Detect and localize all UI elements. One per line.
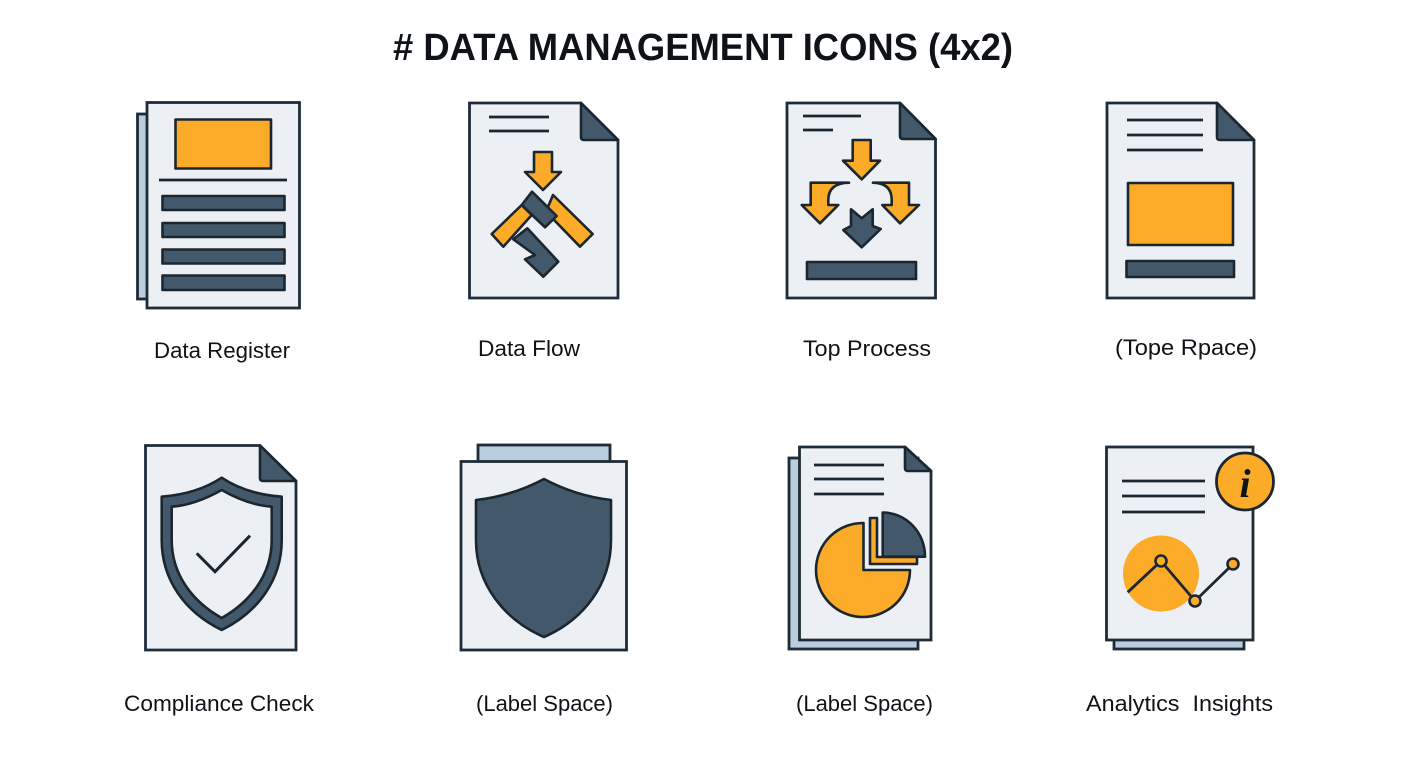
label: label space 2: (Label Space) xyxy=(796,691,933,716)
label: analytics insights: Analytics Insights xyxy=(1086,691,1273,716)
icon: data flow xyxy=(470,103,618,298)
label: tope rpace: (Tope Rpace) xyxy=(1115,335,1257,360)
label: top process: Top Process xyxy=(803,336,931,361)
label: data register: Data Register xyxy=(154,338,290,363)
title: # DATA MANAGEMENT ICONS (4x2) xyxy=(393,27,1013,69)
icon: compliance check xyxy=(146,446,296,650)
icon: tope rpace xyxy=(1107,103,1254,298)
icon: top process xyxy=(787,103,936,298)
icon: analytics insights xyxy=(1106,447,1274,649)
icon: label space shield xyxy=(461,445,626,650)
icon: pie chart document xyxy=(789,447,931,649)
label: data flow: Data Flow xyxy=(478,336,580,361)
icon: data register xyxy=(138,102,300,308)
icon: analytics insights: i xyxy=(1239,461,1251,506)
label: compliance check: Compliance Check xyxy=(124,691,315,716)
label: label space 1: (Label Space) xyxy=(476,691,613,716)
